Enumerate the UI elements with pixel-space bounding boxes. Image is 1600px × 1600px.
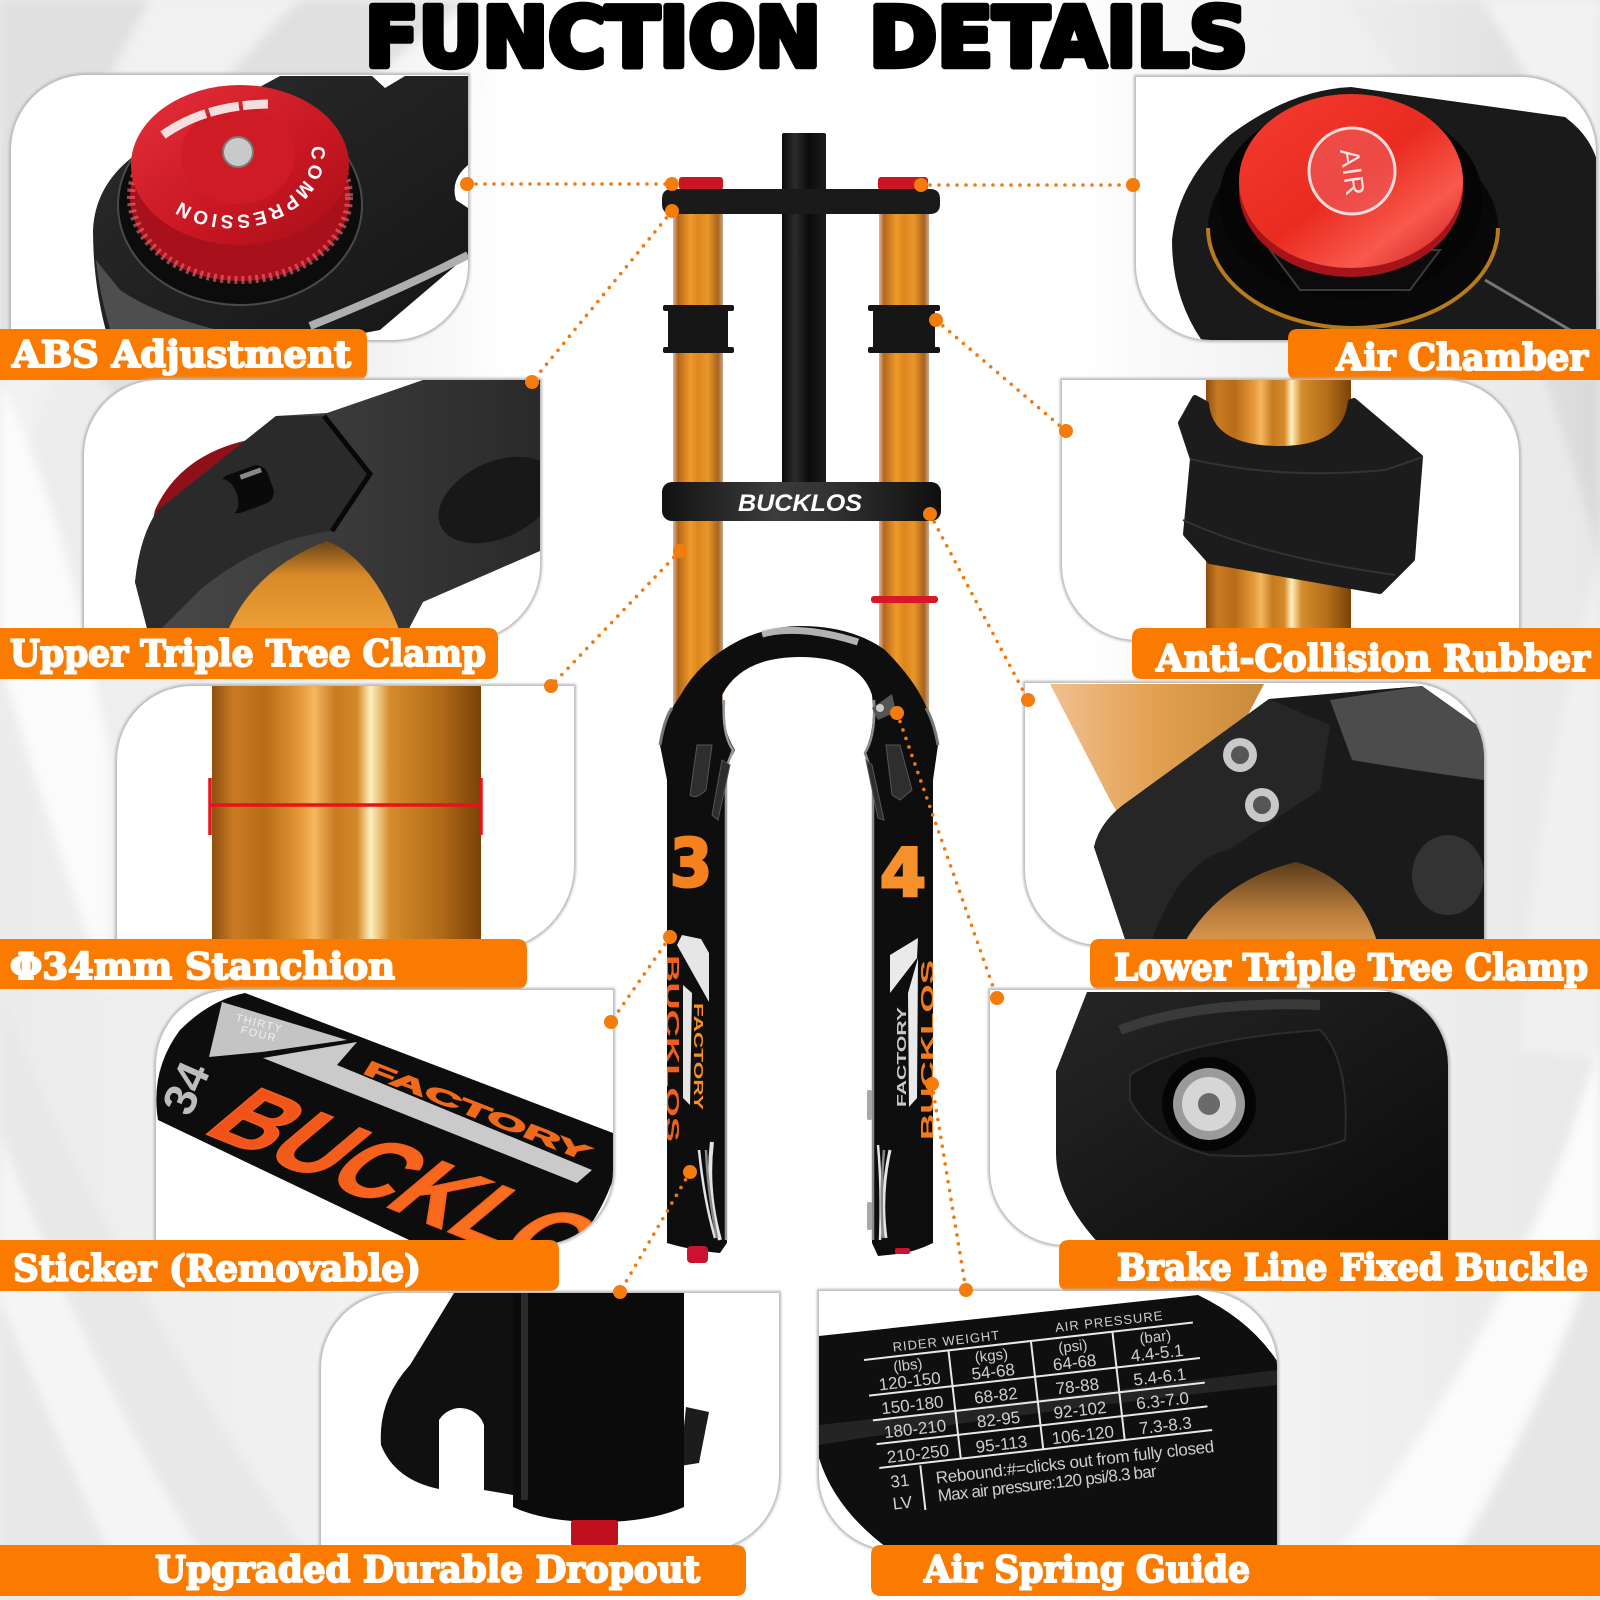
label: [0, 1545, 746, 1596]
crown logo: BUCKLOS: [738, 490, 862, 517]
right leg sticker: FACTORY: [894, 1006, 909, 1107]
photo: gold stanchion: [212, 686, 481, 951]
left leg sticker: FACTORY: [691, 1003, 706, 1111]
photo: buckle: [1056, 992, 1449, 1250]
photo: lower clamp: [1050, 684, 1484, 945]
label: Φ34mm Stanchion: [10, 946, 395, 988]
photo: sticker tube: FACTORY: [359, 1058, 595, 1165]
stanchion left: [673, 210, 723, 730]
photo: sticker tube: [156, 993, 613, 1242]
pressure table: RIDER WEIGHT: [892, 1327, 1001, 1355]
label: ABS Adjustment: [11, 334, 351, 376]
pressure table: Max air pressure:120 psi/8.3 bar: [937, 1462, 1158, 1505]
photo: air cap: [1172, 87, 1600, 345]
leader lines and dots: [460, 177, 1140, 1299]
brake line buckle: [872, 694, 896, 720]
pressure table: LV: [892, 1492, 914, 1514]
photo: upper clamp: [135, 380, 540, 628]
label: Brake Line Fixed Buckle: [1117, 1247, 1588, 1289]
arch highlights: [762, 630, 858, 642]
label: Upper Triple Tree Clamp: [10, 633, 486, 675]
pressure table: Rebound:#=clicks out from fully closed: [935, 1437, 1215, 1488]
label: Upgraded Durable Dropout: [155, 1549, 700, 1591]
arch recesses: [690, 745, 912, 820]
pressure table: (kgs): [974, 1346, 1009, 1366]
right leg sticker: [890, 938, 933, 1138]
pressure table: 106-120: [1051, 1422, 1115, 1448]
dropout gloss: [699, 1142, 890, 1240]
number 3: 3: [670, 825, 712, 902]
steerer tube: [782, 133, 826, 485]
stanchion right: [879, 210, 929, 730]
label: Air Chamber: [1335, 337, 1589, 379]
photo: air pressure tube: [819, 1295, 1277, 1550]
photo: compression knob: COMPRESSION: [176, 146, 325, 228]
pressure table: 95-113: [975, 1432, 1028, 1457]
left leg sticker: BUCKLOS: [662, 955, 682, 1142]
pressure table: (bar): [1139, 1327, 1172, 1348]
pressure table: 78-88: [1055, 1375, 1100, 1398]
photo: sticker tube: THIRTY: [234, 1012, 284, 1036]
upper crown: [662, 189, 940, 214]
label: [0, 939, 527, 989]
pressure table: 180-210: [883, 1416, 947, 1442]
photo: sticker tube: FOUR: [239, 1024, 278, 1045]
panel: Upper Triple Tree Clamp: [0, 380, 569, 679]
right leg sticker: BUCKLOS: [918, 960, 938, 1140]
grey tabs: [867, 1090, 872, 1230]
panel: Anti-Collision Rubber: [1062, 380, 1600, 680]
fork product illustration: [660, 133, 941, 1263]
panel: Air Chamber: [1136, 77, 1600, 380]
left leg sticker: [667, 935, 709, 1140]
photo: compression knob: [93, 76, 468, 333]
panel: ABS Adjustment: [0, 72, 472, 380]
pressure table: 5.4-6.1: [1132, 1365, 1187, 1390]
arch and lowers: [660, 626, 938, 1256]
pressure table: 68-82: [973, 1384, 1019, 1408]
pressure table: 210-250: [886, 1441, 950, 1467]
pressure table: 120-150: [878, 1368, 942, 1394]
panel: Dropout: [0, 1293, 779, 1596]
pressure table: 150-180: [880, 1392, 945, 1418]
pressure table: 82-95: [976, 1408, 1021, 1432]
pressure table: (psi): [1057, 1337, 1088, 1357]
label: Sticker (Removable): [13, 1248, 421, 1290]
photo: rubber bumper: [1181, 380, 1423, 645]
label: Lower Triple Tree Clamp: [1114, 947, 1588, 989]
rubber bumpers: [663, 305, 940, 353]
pressure table: 7.3-8.3: [1138, 1413, 1193, 1438]
diameter marker: [210, 778, 481, 835]
pressure table: 92-102: [1053, 1398, 1107, 1423]
pressure table: (lbs): [892, 1355, 923, 1376]
title: [365, 0, 1248, 86]
panel: Sticker: [0, 990, 630, 1291]
pressure table: 31: [889, 1471, 910, 1492]
label: Air Spring Guide: [923, 1549, 1250, 1591]
panel: stanchion: [0, 686, 574, 989]
red axle bolts: [687, 1246, 910, 1263]
photo: sticker tube: 34: [152, 1054, 220, 1122]
label: [1288, 329, 1600, 380]
photo: sticker tube: BUCKLO: [184, 1071, 630, 1291]
pressure table: 4.4-5.1: [1130, 1341, 1184, 1366]
pressure table: 6.3-7.0: [1135, 1389, 1190, 1413]
pressure table: [862, 1304, 1217, 1515]
red caps: [679, 177, 928, 190]
label: [871, 1545, 1600, 1596]
panel: Air Spring Guide: [819, 1291, 1600, 1596]
pressure table: AIR PRESSURE: [1054, 1308, 1164, 1335]
lower crown: [662, 482, 941, 521]
label: [0, 1240, 559, 1291]
panel: Lower Triple Tree Clamp: [1025, 683, 1600, 989]
pressure table: 64-68: [1052, 1351, 1097, 1375]
label: Anti-Collision Rubber: [1155, 638, 1591, 680]
pressure table: 54-68: [971, 1360, 1016, 1384]
panel: Brake Line Fixed Buckle: [990, 990, 1600, 1291]
photo: air cap: AIR: [1334, 147, 1370, 198]
red o-ring: [871, 596, 938, 603]
photo: dropout: [381, 1293, 709, 1546]
number 4: 4: [880, 835, 926, 912]
